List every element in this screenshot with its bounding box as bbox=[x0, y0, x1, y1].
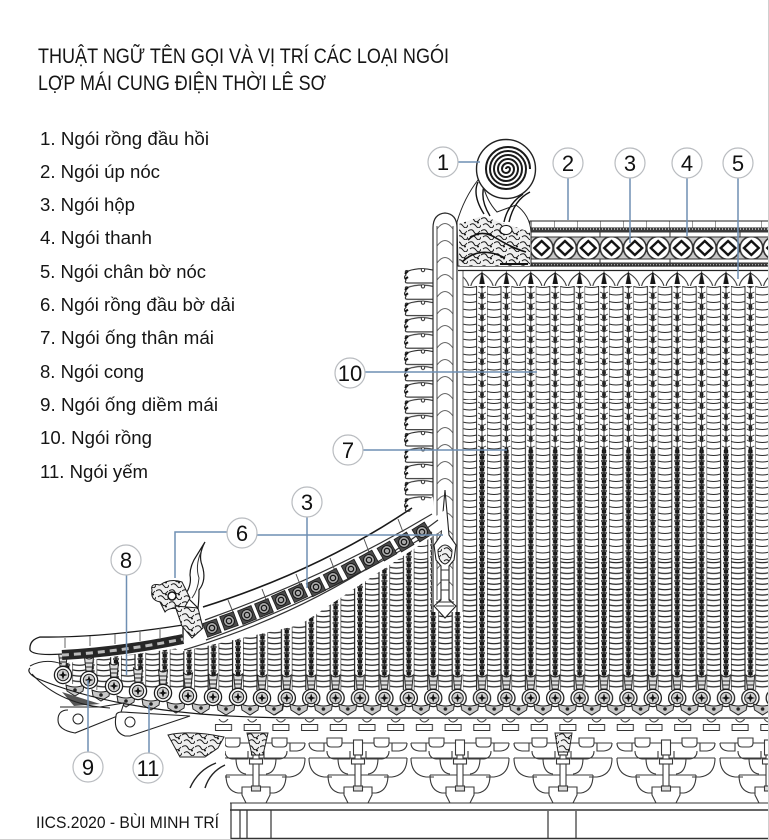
callout 3 (hip) bbox=[292, 487, 322, 588]
callout 3 (ridge): 3 bbox=[624, 151, 636, 176]
side wall tiles left of the ridge bbox=[402, 268, 433, 513]
title: LỢP MÁI CUNG ĐIỆN THỜI LÊ SƠ bbox=[38, 72, 326, 95]
box tiles bbox=[203, 522, 432, 637]
hip roof slope: tile rows under the left eave bbox=[66, 536, 461, 690]
callout 5: 5 bbox=[732, 151, 744, 176]
callout 11 bbox=[133, 705, 163, 783]
callout 8: 8 bbox=[120, 548, 132, 573]
callout 2: 2 bbox=[562, 151, 574, 176]
callout 8 bbox=[111, 545, 141, 675]
ridge end finial with small guardian figure bbox=[434, 490, 456, 618]
callout 6 bbox=[175, 518, 443, 578]
callout 6: 6 bbox=[236, 521, 248, 546]
small brackets row bbox=[209, 719, 769, 733]
legend list: 2. Ngói úp nóc bbox=[40, 161, 160, 182]
callout 5 bbox=[723, 148, 753, 279]
legend list: 6. Ngói rồng đầu bờ dải bbox=[40, 294, 235, 315]
legend list: 3. Ngói hộp bbox=[40, 194, 135, 215]
hip roof: curved ridge tiles and box tile band bbox=[166, 497, 445, 652]
carved column heads and lower corner dragon bbox=[168, 733, 572, 788]
callout 4: 4 bbox=[681, 151, 693, 176]
callout 4 bbox=[672, 148, 702, 236]
legend list: 1. Ngói rồng đầu hồi bbox=[40, 128, 209, 149]
legend list: 5. Ngói chân bờ nóc bbox=[40, 261, 206, 282]
vertical hip ridge column bbox=[433, 213, 457, 612]
callout 2 bbox=[553, 148, 583, 220]
callout 11: 11 bbox=[137, 756, 159, 781]
callout 7: 7 bbox=[342, 438, 354, 463]
rafters and brackets under the eave bbox=[32, 674, 190, 736]
callout 3 (ridge) bbox=[615, 148, 645, 243]
callout 7 bbox=[333, 435, 507, 465]
credit: IICS.2020 - BÙI MINH TRÍ bbox=[36, 813, 219, 832]
callout 10 bbox=[335, 358, 537, 388]
legend list: 9. Ngói ống diềm mái bbox=[40, 394, 218, 415]
row of eave-end tiles and drip tiles bbox=[54, 652, 769, 718]
main roof slope: tile rows bbox=[463, 270, 769, 690]
icon: dragon end tile with spiral bbox=[457, 140, 536, 266]
main ridge: up-turned ridge tiles, lattice and brick bands bbox=[458, 221, 769, 270]
callout 10: 10 bbox=[338, 361, 362, 386]
callout 1: 1 bbox=[437, 150, 449, 175]
legend list: 4. Ngói thanh bbox=[40, 227, 152, 248]
callout 9: 9 bbox=[82, 755, 94, 780]
left eave: tip, ridge tiles and carved dark band bbox=[29, 625, 769, 718]
dragon on hip ridge with flame tail bbox=[152, 542, 205, 638]
title bbox=[38, 44, 449, 95]
legend list: 8. Ngói cong bbox=[40, 361, 144, 382]
bracket sets on the columns bbox=[0, 737, 769, 803]
legend list bbox=[40, 128, 235, 482]
legend list: 7. Ngói ống thân mái bbox=[40, 327, 214, 348]
legend list: 11. Ngói yếm bbox=[40, 461, 148, 482]
base beam and posts bbox=[230, 803, 769, 839]
title: THUẬT NGỮ TÊN GỌI VÀ VỊ TRÍ CÁC LOẠI NGÓI bbox=[38, 44, 449, 68]
callout 1 bbox=[428, 147, 480, 177]
callout 3 (hip): 3 bbox=[301, 490, 313, 515]
callout 9 bbox=[73, 680, 103, 782]
legend list: 10. Ngói rồng bbox=[40, 427, 152, 448]
